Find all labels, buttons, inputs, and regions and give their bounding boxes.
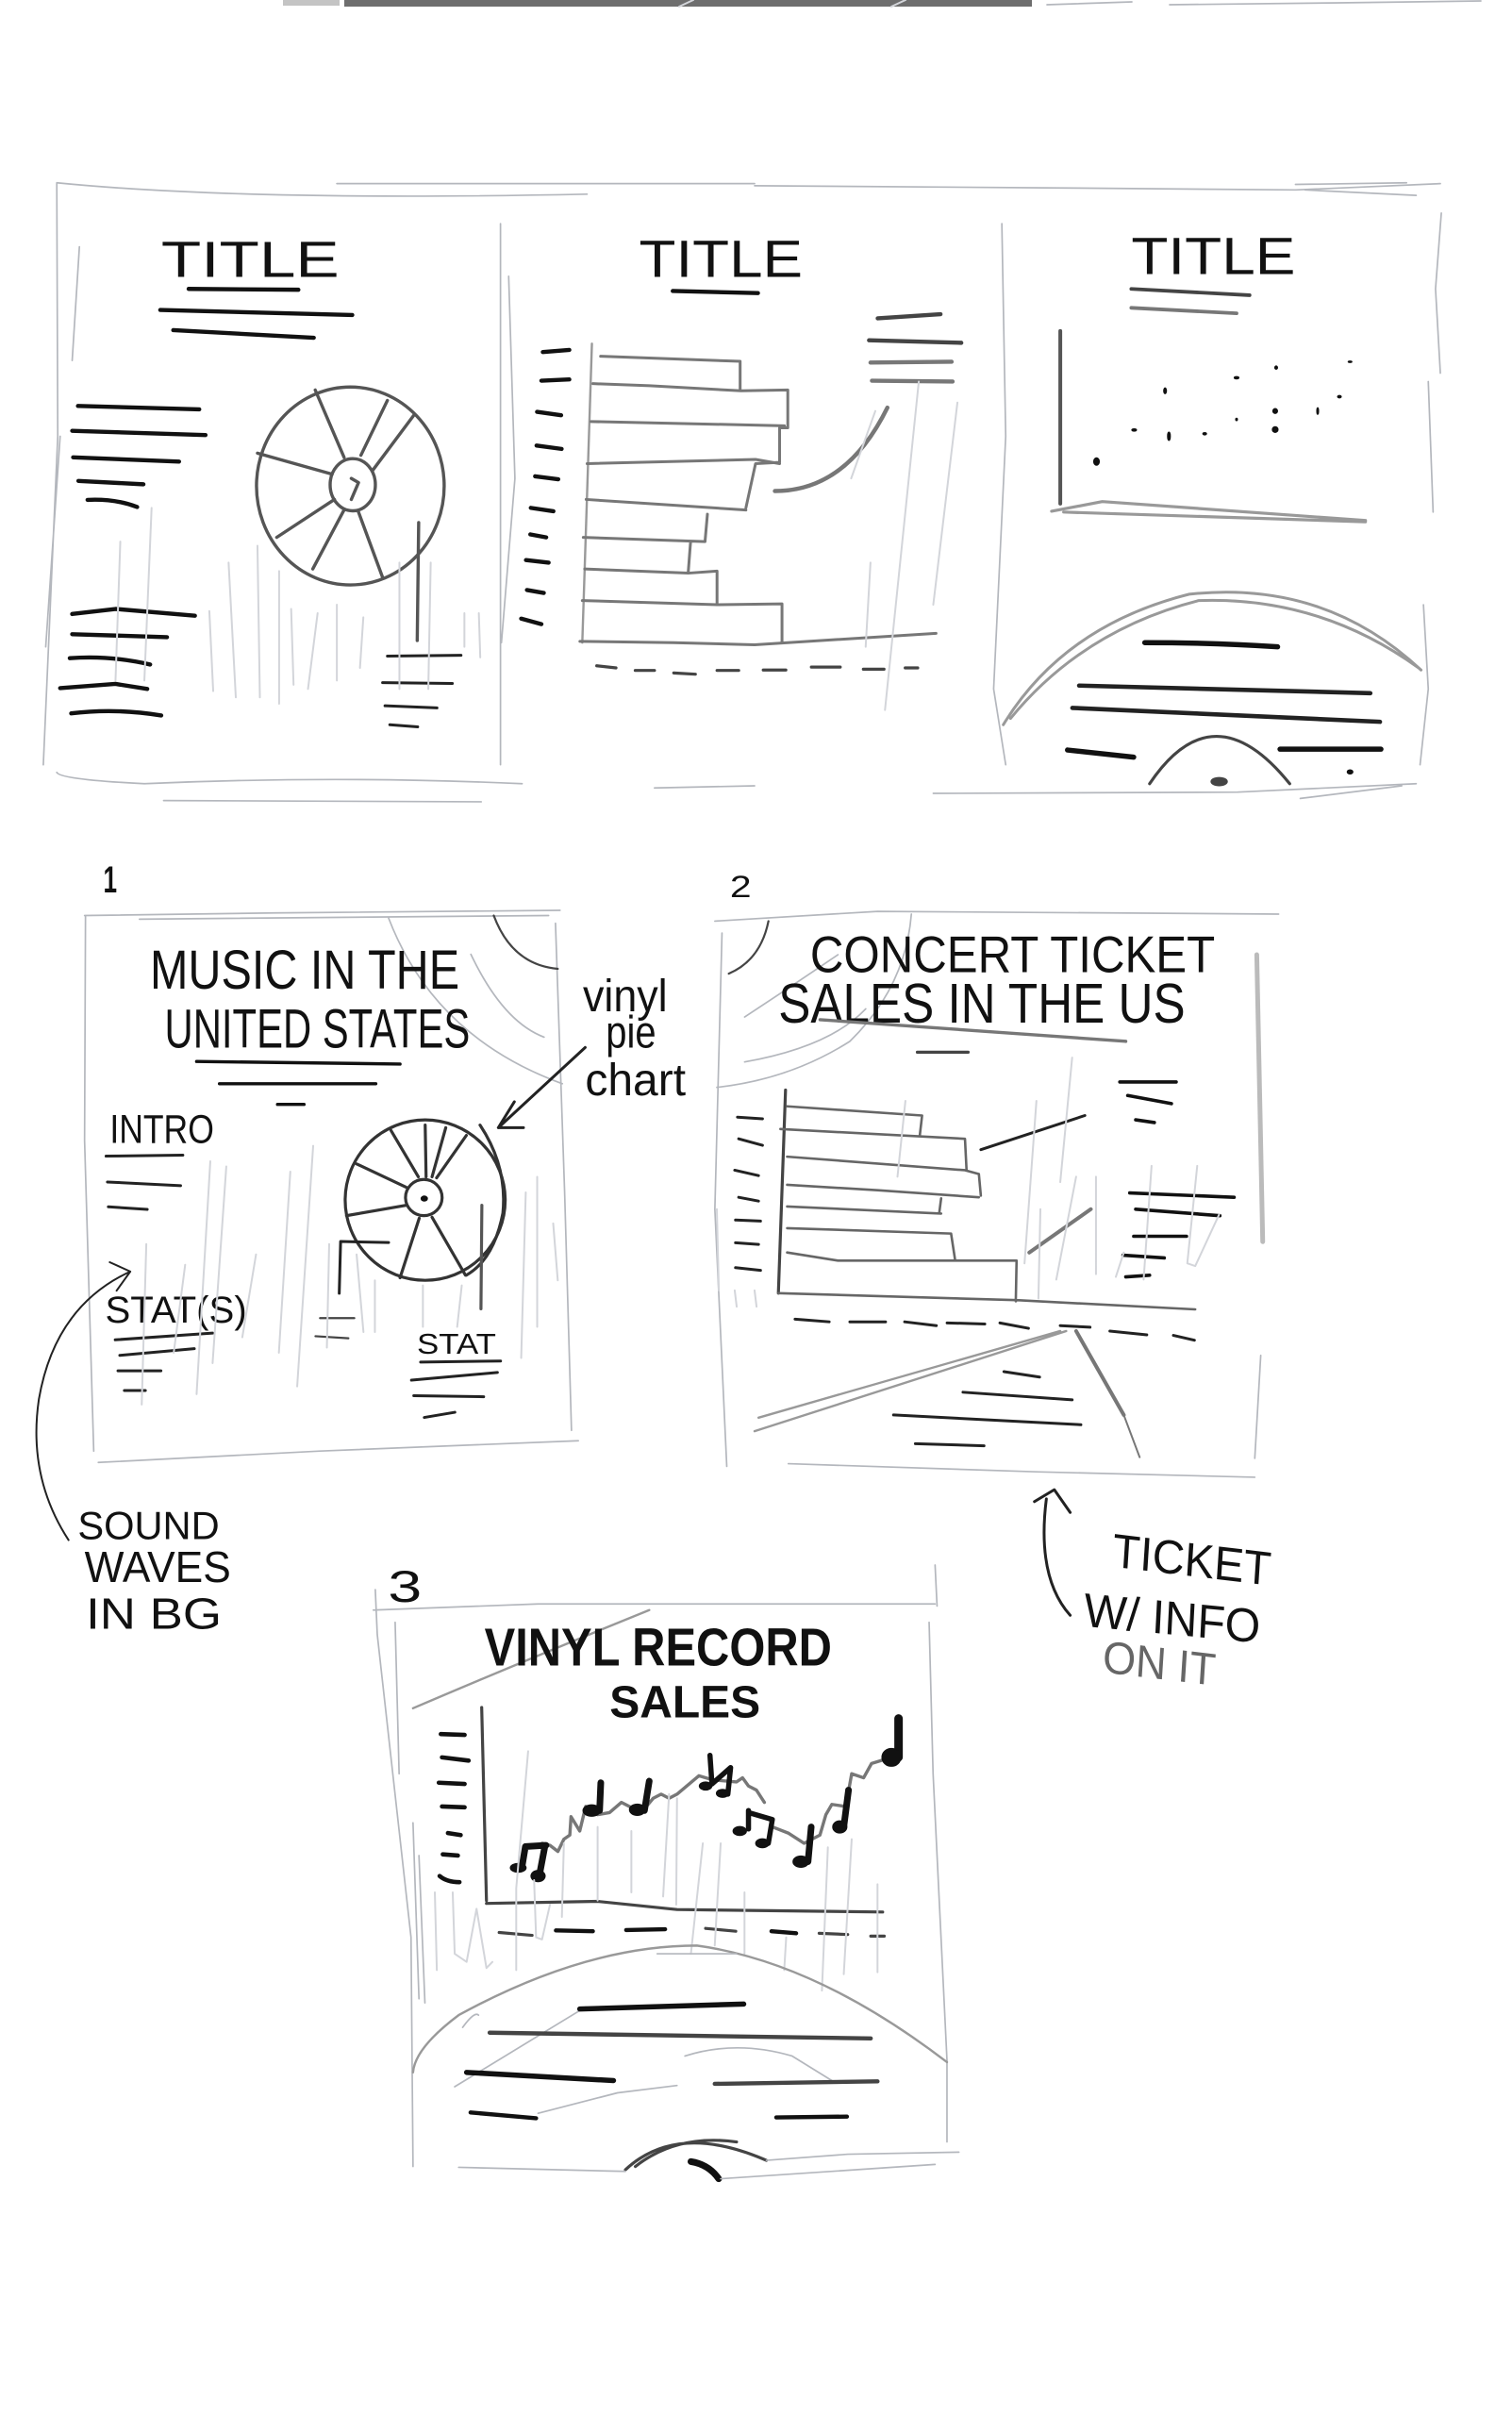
stat callouts (315, 1206, 482, 1339)
stat heading and text: STAT (417, 1329, 496, 1361)
title: CONCERT TICKET (810, 925, 1215, 984)
thumbnail 3: scatter plot (1052, 331, 1366, 522)
thumbnail 2: title: TITLE (640, 229, 803, 289)
thumbnail 2: bar chart (580, 343, 936, 644)
thumbnail 3: title: TITLE (1131, 226, 1295, 286)
title: UNITED STATES (164, 997, 470, 1059)
panel: sketch 1 music in the united states (37, 858, 686, 1639)
stat(s) heading and text (105, 1289, 247, 1391)
panel: sketch 3 vinyl record sales (374, 1560, 959, 2179)
line chart labels (439, 1734, 469, 1882)
panel: sketch 2 concert ticket sales (715, 870, 1279, 1695)
stat(s) heading and text: STAT(S) (105, 1289, 247, 1331)
thumbnail 1: title (160, 232, 352, 338)
line chart with music notes (482, 1707, 901, 1912)
vinyl record with text (413, 1945, 959, 2179)
annotation: ticket with info on it (1035, 1490, 1272, 1695)
title (485, 1618, 832, 1728)
thumbnail 1: callout stat (383, 523, 461, 726)
thumbnail 1: text block top (73, 406, 206, 507)
annotation: vinyl pie chart: pie (606, 1007, 656, 1058)
intro heading and text: INTRO (109, 1106, 214, 1152)
number 3: 3 (388, 1560, 422, 1611)
title (778, 925, 1215, 1052)
annotation: sound waves in bg: WAVES (85, 1544, 231, 1592)
annotation: ticket with info on it: W/ INFO (1083, 1584, 1262, 1654)
annotation: sound waves in bg: SOUND (77, 1504, 220, 1548)
annotation: vinyl pie chart (498, 971, 686, 1127)
bar chart labels (735, 1117, 762, 1271)
title: VINYL RECORD (485, 1618, 832, 1676)
dashed axis labels (795, 1319, 1194, 1341)
number 2: 2 (730, 870, 752, 904)
thumbnail 3: title (1131, 226, 1295, 313)
thumbnail 1: text block bottom (60, 609, 195, 715)
scanned top edge strip (283, 0, 1481, 7)
panel: thumbnail sketch row frame (43, 183, 936, 802)
title: SALES (609, 1677, 760, 1728)
thumbnail 2: axis dashes (597, 666, 918, 675)
vinyl pie chart (345, 1120, 506, 1280)
thumbnail 2: bar chart labels (522, 350, 570, 625)
annotation: vinyl pie chart: vinyl (583, 971, 668, 1022)
annotation: sound waves in bg (37, 1262, 231, 1639)
annotation: ticket with info on it: TICKET (1111, 1524, 1272, 1596)
annotation: ticket with info on it: ON IT (1102, 1631, 1218, 1695)
title (150, 939, 470, 1105)
title: MUSIC IN THE (150, 939, 459, 1001)
dashed axis labels (499, 1928, 884, 1936)
title: SALES IN THE US (778, 973, 1186, 1035)
chart callouts with text (981, 1082, 1234, 1277)
number 1: 1 (104, 858, 117, 900)
thumbnail 3: vinyl record with text (1004, 592, 1421, 786)
ticket shape with info (755, 1331, 1139, 1457)
stat heading and text (411, 1329, 501, 1418)
annotation: vinyl pie chart: chart (585, 1054, 686, 1105)
thumbnail 2: text block and curved connector (775, 314, 961, 491)
thumbnail 1: title: TITLE (161, 232, 340, 289)
intro heading and text (106, 1106, 214, 1209)
annotation: sound waves in bg: IN BG (86, 1591, 222, 1639)
thumbnail 1: vinyl pie chart (257, 387, 444, 585)
bar chart (778, 1091, 1195, 1309)
